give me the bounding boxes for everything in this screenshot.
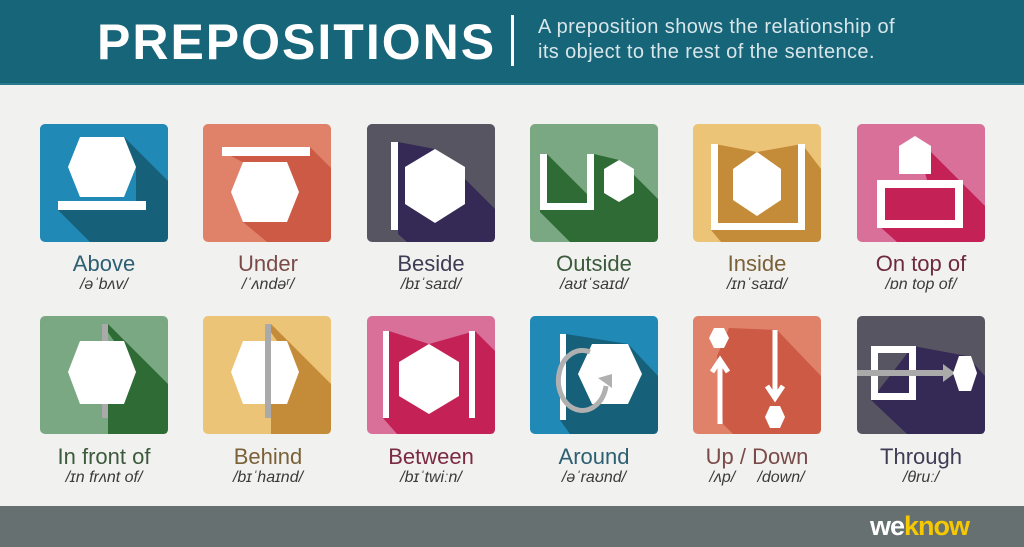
header band	[0, 0, 1024, 85]
card: above	[40, 124, 168, 242]
logo: weknow	[870, 511, 969, 541]
label: around	[558, 444, 629, 486]
label: on top of	[876, 251, 966, 293]
card: around	[530, 316, 658, 434]
card: through	[857, 316, 985, 434]
label: behind: Behind	[234, 444, 302, 469]
footer	[0, 506, 1024, 547]
label: between	[388, 444, 474, 486]
label: on top of: On top of	[876, 251, 966, 276]
label: under: /ˈʌndəʳ/	[242, 276, 294, 293]
card: in front of	[40, 316, 168, 434]
label: outside: /aʊtˈsaɪd/	[560, 276, 628, 293]
label: under	[238, 251, 298, 293]
label: around: Around	[559, 444, 629, 469]
card: behind	[203, 316, 331, 434]
label: above	[72, 251, 135, 293]
label: on top of: /ɒn top of/	[885, 276, 957, 293]
label: inside: Inside	[728, 251, 786, 276]
label: outside	[556, 251, 632, 293]
label: under: Under	[238, 251, 298, 276]
label: beside	[397, 251, 465, 293]
label: outside: Outside	[556, 251, 632, 276]
card: under	[203, 124, 331, 242]
card: beside	[367, 124, 495, 242]
label: beside: Beside	[397, 251, 465, 276]
label: between: Between	[388, 444, 474, 469]
label: above: /əˈbʌv/	[80, 276, 128, 293]
subtitle	[538, 16, 895, 63]
card: outside	[530, 124, 658, 242]
label: between: /bɪˈtwiːn/	[400, 469, 462, 486]
label: above: Above	[73, 251, 135, 276]
label: through	[880, 444, 962, 486]
label: inside	[726, 251, 788, 293]
label: in front of: /ɪn frʌnt of/	[66, 469, 142, 486]
subtitle: A preposition shows the relationship of	[538, 16, 895, 38]
label: up/down: /ʌp/ /down/	[709, 469, 805, 486]
card: between	[367, 316, 495, 434]
subtitle: its object to the rest of the sentence.	[538, 41, 875, 63]
label: through: Through	[880, 444, 962, 469]
label: up/down: Up / Down	[706, 444, 808, 469]
label: in front of	[58, 444, 151, 486]
title: PREPOSITIONS	[97, 14, 496, 70]
label: in front of: In front of	[58, 444, 150, 469]
label: inside: /ɪnˈsaɪd/	[727, 276, 787, 293]
label: behind: /bɪˈhaɪnd/	[233, 469, 303, 486]
label: beside: /bɪˈsaɪd/	[401, 276, 461, 293]
label: through: /θruː/	[903, 469, 939, 486]
card: up/down	[693, 316, 821, 434]
label: up/down	[706, 444, 808, 486]
label: behind	[232, 444, 304, 486]
label: around: /əˈraʊnd/	[562, 469, 626, 486]
card: on top of	[857, 124, 985, 242]
card: inside	[693, 124, 821, 242]
